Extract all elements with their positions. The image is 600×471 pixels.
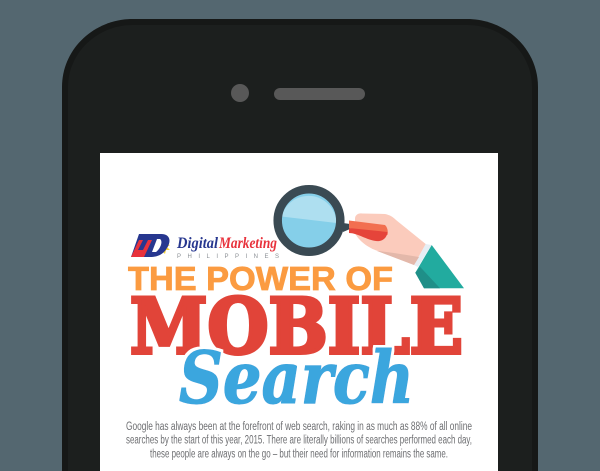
title: Search: Search bbox=[179, 335, 414, 420]
phone speaker bbox=[274, 88, 365, 100]
intro paragraph bbox=[126, 421, 472, 460]
logo: Digital Marketing Philippines bbox=[131, 234, 279, 260]
intro paragraph: these people are always on the go – but their need for information remains the same. bbox=[150, 448, 448, 460]
sleeve bbox=[415, 245, 464, 288]
logo subtitle: PHILIPPINES bbox=[177, 254, 279, 260]
magnifier handle bbox=[343, 223, 350, 232]
hand bbox=[355, 213, 426, 265]
magnifier lens bbox=[278, 190, 340, 252]
title: Mobile: MOBILE bbox=[130, 282, 463, 371]
title: The Power Of: THE POWER OF bbox=[128, 260, 393, 297]
icon: hand holding magnifying glass bbox=[278, 189, 464, 288]
phone body bbox=[62, 19, 538, 471]
cuff bbox=[414, 244, 432, 267]
logo: Digital Marketing Philippines: Marketing bbox=[218, 235, 277, 252]
phone camera bbox=[231, 84, 249, 102]
magnifier rim bbox=[278, 189, 340, 252]
logo mark bbox=[131, 234, 170, 257]
phone screen bbox=[100, 153, 498, 471]
intro paragraph: Google has always been at the forefront of web search, raking in as much as 88% of all online bbox=[126, 421, 472, 433]
logo wordmark: Digital bbox=[176, 235, 218, 252]
